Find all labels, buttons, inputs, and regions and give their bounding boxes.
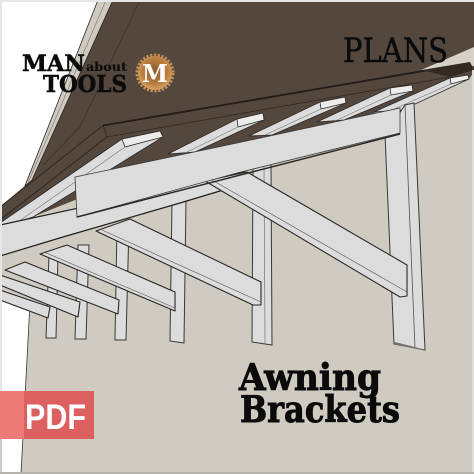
word TOOLS: TOOLS bbox=[43, 71, 127, 98]
brace 3 bbox=[40, 245, 175, 311]
rafter 5 bbox=[374, 75, 469, 112]
white sky top left bbox=[2, 2, 100, 205]
brace 5 bbox=[0, 275, 80, 317]
wall triangle top right bbox=[421, 47, 474, 70]
roof seam line bbox=[43, 0, 140, 165]
title line 1: Awning bbox=[238, 357, 381, 399]
letter M: M bbox=[142, 59, 168, 88]
post 2 bbox=[252, 165, 272, 345]
brace 6 bbox=[0, 290, 50, 318]
word MAN: MAN bbox=[22, 51, 85, 77]
brace 4 bbox=[5, 262, 119, 314]
post 5 bbox=[75, 245, 89, 339]
diagonal braces bbox=[0, 172, 407, 318]
main upper beam bbox=[75, 108, 400, 217]
rafter 4 bbox=[317, 85, 413, 122]
rafter tails bbox=[0, 75, 469, 228]
small posts bbox=[46, 165, 272, 345]
rafter 3 bbox=[249, 97, 346, 136]
brace 1 bbox=[205, 172, 407, 297]
title bbox=[238, 357, 400, 431]
post 4 bbox=[115, 225, 129, 340]
lower horizontal beam bbox=[0, 172, 250, 256]
white sky lower left bbox=[2, 296, 30, 474]
post 3 bbox=[170, 200, 186, 343]
side trim strip bbox=[25, 0, 113, 186]
logo wordmark bbox=[22, 51, 127, 98]
wall edge line bbox=[21, 312, 30, 474]
brace 2 bbox=[96, 219, 261, 305]
rafter 1 bbox=[0, 131, 163, 228]
roof underside bbox=[0, 0, 474, 230]
plans label: PLANS bbox=[343, 31, 448, 71]
pdf badge bbox=[0, 391, 94, 439]
title line 2: Brackets bbox=[240, 389, 400, 431]
post 6 bbox=[46, 255, 58, 338]
logo saw badge bbox=[137, 55, 173, 91]
word about: about bbox=[86, 60, 127, 74]
fascia and eave bbox=[0, 62, 474, 220]
rafter 2 bbox=[168, 113, 264, 154]
large right post bbox=[385, 103, 425, 350]
pdf text: PDF bbox=[25, 398, 86, 437]
